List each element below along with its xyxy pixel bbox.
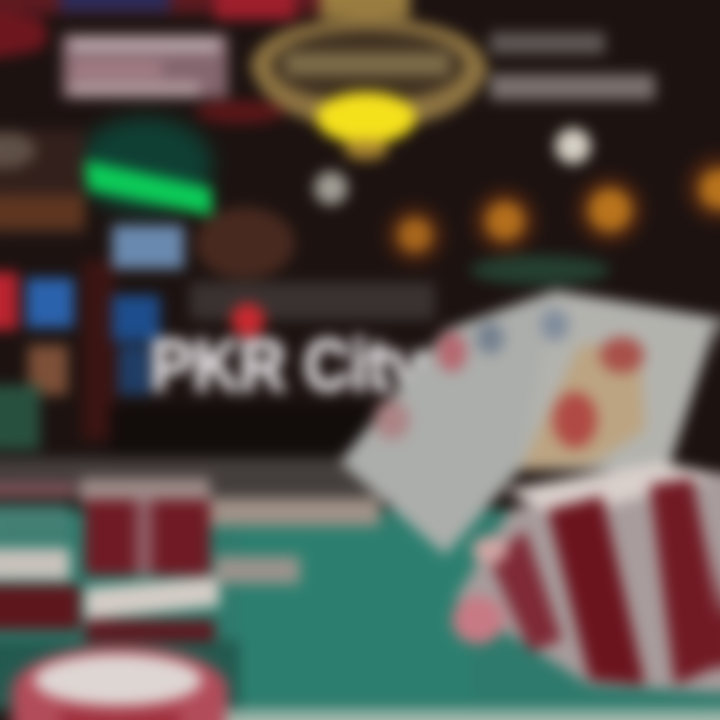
left sign text: [62, 34, 228, 98]
bottom table edge: [225, 710, 720, 720]
playing cards: [340, 290, 718, 555]
green neon sign: [77, 117, 213, 216]
left wall and slot machines: [0, 130, 295, 450]
bottom chip: [12, 646, 228, 720]
poker room sign: PKR City: [150, 326, 425, 406]
gold casino sign: [250, 0, 488, 160]
top banners: [0, 0, 320, 124]
green glow above cards: [470, 255, 610, 285]
dark area below sign: [110, 405, 370, 455]
poker room sign: [150, 282, 435, 406]
left chip stack: [0, 478, 300, 642]
table felt: [0, 458, 720, 710]
right sign text: [490, 32, 655, 100]
orange lights: [383, 152, 720, 267]
white lamps: [314, 128, 591, 205]
right chip stack: [452, 462, 720, 692]
